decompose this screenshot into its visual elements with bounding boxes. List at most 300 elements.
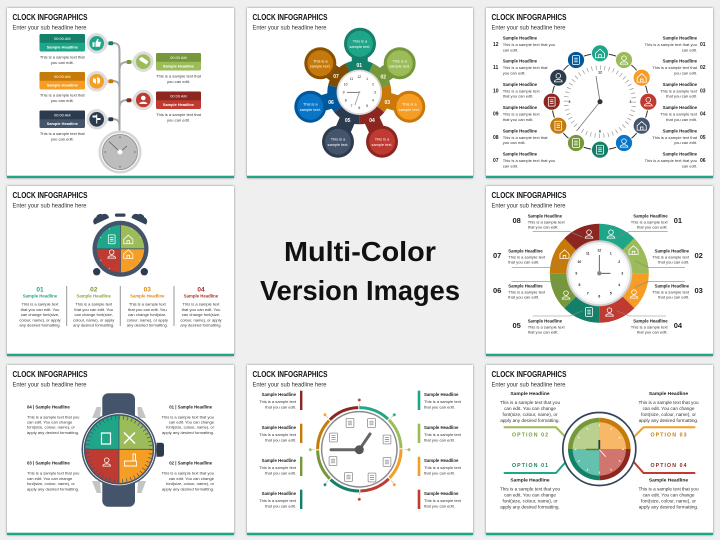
- petal 03: [385, 91, 425, 123]
- clock face: 6: [358, 106, 360, 110]
- panel: vertical timeline clock: [7, 8, 234, 178]
- clock face: 1: [610, 252, 612, 256]
- callout 07: that you can edit.: [508, 260, 539, 265]
- card: teal event: [40, 34, 86, 65]
- right item 3: This is a sample text: [424, 465, 462, 470]
- clock face: 10: [344, 83, 348, 87]
- text 03: This is a sample text that you: [27, 471, 79, 476]
- right item 1: that you can edit.: [424, 404, 455, 409]
- option 03: Sample Headline: [649, 391, 688, 397]
- right text list: Sample Headline: [663, 152, 698, 156]
- right item 4: [418, 490, 462, 509]
- column 03: Sample Headline: [130, 294, 165, 298]
- clock face: 1: [366, 77, 368, 81]
- petal 04: sample text.: [372, 142, 392, 147]
- ring icons: [543, 45, 657, 158]
- callout 08: [512, 214, 565, 230]
- left item 2: that you can edit.: [265, 437, 296, 442]
- left item 4: This is a sample text: [259, 498, 297, 503]
- card: red event: Sample Headline: [163, 102, 195, 107]
- right text list: Sample Headline: [663, 82, 698, 87]
- right text list: 06: [700, 158, 706, 164]
- callout 03: that you can edit.: [658, 295, 689, 300]
- petal 04: [366, 118, 398, 158]
- option 04: [638, 463, 699, 509]
- option 04: apply any desired formatting.: [639, 504, 698, 509]
- left text list: 10: [493, 88, 499, 94]
- clock face: [337, 70, 382, 115]
- option 04: Sample Headline: [649, 478, 688, 484]
- option 03: can edit. You can change: [643, 406, 695, 411]
- option 01: This is a sample text that you: [500, 486, 560, 491]
- card: orange event: 00:00 AM: [54, 74, 71, 79]
- column 03: that you can edit. You: [128, 307, 167, 312]
- card: green event: [156, 53, 202, 84]
- left item 1: This is a sample text: [259, 399, 297, 404]
- left item 4: [259, 490, 302, 509]
- title: CLOCK INFOGRAPHICS: [12, 191, 88, 200]
- left text list: [493, 36, 555, 168]
- text 01: 01 | Sample Headline: [169, 404, 213, 409]
- title: CLOCK INFOGRAPHICS: [492, 191, 566, 200]
- right text list: can edit.: [682, 47, 697, 52]
- left text list: This is a sample text: [503, 88, 540, 93]
- left text list: Sample Headline: [503, 152, 538, 156]
- callout 04: Sample Headline: [633, 318, 668, 324]
- left text list: This is a sample text that: [503, 65, 548, 70]
- clock face: 11: [350, 77, 353, 81]
- text 01: This is a sample text that you: [162, 414, 214, 419]
- left item 1: [259, 391, 302, 410]
- clock face: 12: [357, 75, 361, 79]
- text 03: apply any desired formatting.: [27, 486, 79, 491]
- text 01: font(size, colour, name), or: [166, 425, 215, 430]
- text 04: can edit. You can change: [27, 420, 73, 424]
- column 01: any desired formatting.: [19, 323, 61, 328]
- text 02: 02 | Sample Headline: [169, 461, 213, 466]
- right text list: Sample Headline: [663, 105, 698, 110]
- sub headline: Enter your sub headline here: [252, 382, 327, 388]
- left item 1: Sample Headline: [262, 392, 297, 397]
- column 03: [127, 286, 169, 328]
- callout 06: 06: [493, 286, 501, 295]
- panel: arc ring clock: [247, 365, 473, 535]
- column 02: colour, name), or apply: [73, 317, 115, 322]
- clock face: 5: [366, 104, 368, 108]
- left text list: Sample Headline: [503, 128, 538, 133]
- petal 03: This is a: [402, 102, 417, 107]
- petal 05: This is a: [331, 137, 346, 142]
- card: red event: [156, 92, 202, 122]
- callout 04: that you can edit.: [637, 330, 668, 335]
- option 04: font(size, colour, name), or: [641, 498, 696, 503]
- center message: [260, 236, 460, 306]
- callout 07: 07: [493, 251, 501, 260]
- callout 06: [493, 284, 546, 300]
- column 04: Sample Headline: [184, 294, 219, 298]
- callout 02: Sample Headline: [655, 248, 690, 254]
- left text list: This is a sample text that: [503, 135, 548, 140]
- callout 06: Sample Headline: [508, 284, 543, 288]
- right text list: This is a sample text: [660, 112, 698, 117]
- petal 06: 06: [328, 100, 334, 106]
- title: CLOCK INFOGRAPHICS: [492, 370, 566, 379]
- option 04: can edit. You can change: [643, 492, 695, 497]
- option 04: OPTION 04: [650, 463, 687, 469]
- option 01: OPTION 01: [512, 463, 548, 469]
- clock face: [566, 240, 632, 306]
- option 03: This is a sample text that you: [638, 400, 699, 405]
- option 01: can edit. You can change: [504, 492, 556, 497]
- text 04: [27, 404, 79, 435]
- option 04: This is a sample text that you: [638, 486, 699, 491]
- column 03: This is a sample text: [129, 302, 167, 306]
- left text list: Sample Headline: [503, 36, 538, 40]
- text 01: [162, 404, 215, 435]
- clock face: 4: [372, 98, 374, 102]
- callout 01: This is a sample text: [631, 219, 669, 224]
- center message: Version Images: [260, 275, 460, 306]
- petal 02: 02: [381, 74, 386, 80]
- clock face: 7: [587, 291, 589, 295]
- petal 02: sample text.: [389, 64, 410, 69]
- petal 06: [294, 91, 334, 123]
- option 02: OPTION 02: [512, 433, 548, 439]
- panel: twelve icon ring clock: [486, 8, 713, 178]
- icon: red person: [126, 90, 154, 110]
- petal 03: 03: [385, 100, 390, 106]
- column 02: 02: [90, 286, 98, 294]
- callout 08: Sample Headline: [528, 214, 563, 218]
- left text list: This is a sample text that you: [503, 158, 555, 163]
- card: green event: 00:00 AM: [170, 55, 187, 60]
- option 02: [500, 391, 560, 439]
- card: red event: 00:00 AM: [170, 94, 187, 98]
- left text list: Sample Headline: [503, 105, 538, 110]
- right text list: Sample Headline: [663, 36, 698, 40]
- right text list: that you can edit.: [666, 117, 697, 122]
- clock face: 2: [372, 83, 374, 87]
- column 02: Sample Headline: [77, 294, 112, 298]
- panel: seven petal clock: [247, 8, 473, 178]
- option 03: apply any desired formatting.: [639, 418, 698, 423]
- petal 04: This is a: [375, 137, 390, 142]
- left item 2: [259, 424, 302, 443]
- left text list: can edit.: [503, 47, 518, 52]
- right item 2: [418, 424, 462, 443]
- panel: wrist watch: [7, 365, 234, 535]
- petal 03: sample text.: [399, 107, 420, 112]
- clock face: 12: [597, 248, 601, 252]
- callout 02: that you can edit.: [658, 260, 689, 265]
- left text list: Sample Headline: [503, 59, 538, 64]
- petal 01: [344, 28, 376, 69]
- callout 06: This is a sample text: [508, 289, 546, 294]
- option 01: Sample Headline: [510, 478, 550, 484]
- left text list: you can edit.: [503, 140, 526, 145]
- column 04: that you can edit. You: [182, 307, 220, 312]
- right item 2: Sample Headline: [424, 425, 459, 430]
- clock dial with ticks and hands: 6: [599, 130, 601, 134]
- text 03: can edit. You can change: [27, 476, 73, 481]
- card: green event: you can edit.: [167, 79, 190, 84]
- right text list: Sample Headline: [663, 59, 698, 64]
- left text list: you can edit.: [503, 70, 526, 76]
- card: teal event: 00:00 AM: [54, 36, 71, 41]
- sub headline: Enter your sub headline here: [492, 202, 566, 210]
- right text list: 02: [700, 65, 706, 71]
- right text list: 01: [700, 42, 706, 48]
- right item 3: [418, 457, 462, 476]
- text 02: This is a sample text that you: [162, 471, 214, 476]
- arc markers: [309, 398, 410, 501]
- callout 02: This is a sample text: [652, 254, 690, 259]
- right item 2: This is a sample text: [424, 432, 462, 437]
- column 04: [180, 286, 223, 328]
- callout 07: Sample Headline: [508, 248, 543, 254]
- column 03: colour, name), or apply: [127, 317, 169, 322]
- column 03: any desired formatting.: [127, 323, 168, 328]
- card: orange event: Sample Headline: [47, 83, 79, 88]
- petal 04: 04: [369, 118, 375, 124]
- icon: teal thumbs up: [86, 33, 113, 54]
- option 03: font(size, colour, name), or: [641, 412, 696, 417]
- card: orange event: [40, 72, 86, 103]
- column 01: that you can edit. You: [21, 307, 59, 312]
- petal 07: 07: [333, 74, 339, 80]
- callout 06: that you can edit.: [508, 295, 539, 300]
- left item 3: This is a sample text: [259, 465, 297, 470]
- callout 03: Sample Headline: [655, 284, 690, 288]
- right text list: you can edit.: [674, 70, 697, 76]
- petal 05: sample text.: [328, 142, 348, 147]
- callout 02: 02: [694, 251, 703, 260]
- option 01: apply any desired formatting.: [500, 504, 560, 509]
- clock face: 6: [598, 294, 600, 298]
- column 02: that you can edit. You: [74, 307, 113, 312]
- clock dial with ticks and hands: 3: [630, 100, 632, 104]
- card: red event: you can edit.: [167, 117, 190, 122]
- right text list: This is a sample text that: [652, 65, 698, 70]
- ring icons: [329, 419, 391, 482]
- card: teal event: Sample Headline: [47, 45, 79, 50]
- card: navy event: you can edit.: [51, 136, 74, 141]
- option 02: This is a sample text that you: [500, 400, 560, 405]
- callout 05: This is a sample text: [528, 324, 565, 329]
- timeline connector: [112, 43, 128, 133]
- petal 06: sample text.: [300, 107, 321, 112]
- card: teal event: you can edit.: [51, 60, 74, 65]
- callout 01: that you can edit.: [637, 225, 668, 230]
- sub headline: Enter your sub headline here: [492, 382, 566, 388]
- clock face: 11: [586, 252, 590, 256]
- right text list: 04: [700, 112, 706, 118]
- clock dial with ticks and hands: 9: [569, 100, 571, 104]
- text 02: can edit. You can change: [169, 476, 215, 481]
- sub headline: Enter your sub headline here: [492, 24, 566, 32]
- text 01: can edit. You can change: [169, 420, 215, 424]
- left text list: 07: [493, 158, 499, 164]
- clock face: 8: [345, 98, 347, 102]
- left item 4: Sample Headline: [262, 491, 297, 496]
- card: red event: This is a sample text that: [156, 112, 202, 117]
- callout 01: Sample Headline: [633, 214, 668, 218]
- card: teal event: This is a sample text that: [40, 54, 86, 60]
- segmented ring: [541, 215, 657, 331]
- title: CLOCK INFOGRAPHICS: [492, 13, 566, 22]
- petal 07: [304, 47, 339, 80]
- column 02: can change font(size,: [74, 312, 113, 317]
- text 02: [162, 461, 215, 491]
- left item 2: This is a sample text: [259, 432, 297, 437]
- panel: four option clock: [486, 365, 713, 535]
- card: orange event: This is a sample text that: [40, 92, 86, 98]
- panel: eight segment dial: [486, 186, 713, 356]
- petal 01: This is a: [353, 39, 368, 44]
- right item 2: that you can edit.: [424, 437, 455, 442]
- quadrant clock: [563, 412, 636, 486]
- column 04: colour, name), or apply: [180, 317, 223, 322]
- right text list: This is a sample text: [660, 88, 698, 93]
- option 02: apply any desired formatting.: [500, 418, 560, 423]
- right text list: 05: [700, 135, 706, 141]
- right item 1: [418, 391, 462, 410]
- column 03: 03: [144, 286, 151, 294]
- callout 08: This is a sample text: [528, 219, 565, 224]
- card: navy event: This is a sample text that: [40, 131, 86, 136]
- callout 03: 03: [694, 286, 703, 295]
- alarm clock graphic: [91, 211, 149, 277]
- right text list: that you can edit.: [666, 94, 697, 99]
- column 01: 01: [36, 286, 44, 294]
- text 03: font(size, colour, name), or: [27, 481, 76, 486]
- sub headline: Enter your sub headline here: [12, 382, 87, 388]
- clock face: 9: [343, 90, 345, 94]
- card: green event: This is a sample text that: [156, 74, 202, 78]
- right item 3: that you can edit.: [424, 470, 455, 475]
- option 02: Sample Headline: [510, 391, 550, 397]
- petal 02: This is a: [392, 58, 408, 63]
- column 01: can change font(size,: [21, 312, 59, 317]
- right item 4: that you can edit.: [424, 503, 455, 508]
- right text list: [645, 36, 706, 168]
- left text list: can edit.: [503, 163, 518, 168]
- right item 4: This is a sample text: [424, 498, 462, 503]
- column 03: can change font(size,: [128, 312, 167, 317]
- sub headline: Enter your sub headline here: [12, 202, 87, 210]
- right item 3: Sample Headline: [424, 458, 459, 463]
- left item 3: that you can edit.: [265, 470, 296, 475]
- callout 05: 05: [512, 321, 521, 330]
- sub headline: Enter your sub headline here: [12, 24, 87, 32]
- option 02: can edit. You can change: [504, 406, 556, 411]
- left text list: that you can edit.: [503, 117, 534, 122]
- petal 05: 05: [345, 118, 351, 124]
- left item 4: that you can edit.: [265, 503, 296, 508]
- petal ring: [310, 44, 409, 142]
- callout 05: Sample Headline: [528, 318, 563, 324]
- callout 07: This is a sample text: [508, 254, 546, 259]
- petal 06: This is a: [303, 102, 318, 107]
- segment icons: [560, 230, 638, 316]
- clock face: 3: [374, 90, 376, 94]
- right text list: This is a sample text that: [652, 135, 698, 140]
- right text list: 03: [700, 88, 706, 94]
- column 04: This is a sample text: [183, 302, 220, 306]
- right text list: This is a sample text that you: [645, 158, 697, 163]
- column 04: any desired formatting.: [180, 323, 222, 328]
- left item 2: Sample Headline: [262, 425, 297, 430]
- column 04: can change font(size,: [182, 312, 220, 317]
- callout 08: 08: [512, 216, 521, 225]
- petal 07: This is a: [313, 58, 328, 63]
- title: CLOCK INFOGRAPHICS: [12, 13, 88, 22]
- text 02: apply any desired formatting.: [162, 486, 214, 491]
- text 01: apply any desired formatting.: [162, 430, 214, 435]
- right text list: This is a sample text that you: [645, 42, 697, 47]
- left item 1: that you can edit.: [265, 404, 296, 409]
- petal 01: 01: [357, 63, 362, 69]
- left text list: 12: [493, 42, 499, 48]
- petal 05: [322, 118, 354, 158]
- left text list: that you can edit.: [503, 94, 534, 99]
- column 02: [73, 286, 115, 328]
- left text list: This is a sample text that you: [503, 42, 555, 47]
- option arrows: [504, 427, 694, 473]
- callout 04: [631, 318, 683, 335]
- clock face: 5: [610, 291, 612, 295]
- right item 1: Sample Headline: [424, 392, 459, 397]
- panel: alarm clock: [7, 186, 234, 356]
- callout 04: 04: [674, 321, 683, 330]
- left item 3: [259, 457, 302, 476]
- clock face: 3: [621, 272, 623, 276]
- petal 01: sample text.: [350, 44, 370, 49]
- clock face: 2: [618, 260, 620, 264]
- text 02: font(size, colour, name), or: [166, 481, 215, 486]
- petal 02: [381, 47, 416, 80]
- left text list: This is a sample text: [503, 112, 540, 117]
- card: navy event: 00:00 AM: [54, 112, 71, 118]
- text 03: 03 | Sample Headline: [27, 461, 70, 466]
- right text list: Sample Headline: [663, 128, 698, 133]
- card: navy event: Sample Headline: [47, 121, 79, 126]
- column 02: This is a sample text: [75, 302, 113, 306]
- clock: [98, 130, 142, 174]
- callout 03: This is a sample text: [652, 289, 690, 294]
- column 01: colour, name), or apply: [19, 317, 62, 322]
- callout 08: that you can edit.: [528, 225, 559, 230]
- callout 05: [512, 318, 565, 335]
- clock hands: [331, 434, 370, 454]
- left text list: Sample Headline: [503, 82, 538, 87]
- left text list: 11: [493, 65, 499, 71]
- sub headline: Enter your sub headline here: [252, 24, 327, 32]
- text 04: apply any desired formatting.: [27, 430, 79, 435]
- callout 05: that you can edit.: [528, 330, 559, 335]
- option 01: font(size, colour, name), or: [503, 498, 558, 503]
- clock face: 7: [351, 104, 353, 108]
- watch graphic: [82, 393, 164, 507]
- center message: Multi-Color: [284, 236, 436, 267]
- right item 4: Sample Headline: [424, 491, 459, 496]
- column 04: 04: [197, 286, 205, 294]
- icon: navy signpost: [86, 109, 113, 130]
- column 02: any desired formatting.: [73, 323, 114, 328]
- right item 1: This is a sample text: [424, 399, 462, 404]
- left text list: 09: [493, 112, 499, 118]
- title: CLOCK INFOGRAPHICS: [252, 13, 328, 22]
